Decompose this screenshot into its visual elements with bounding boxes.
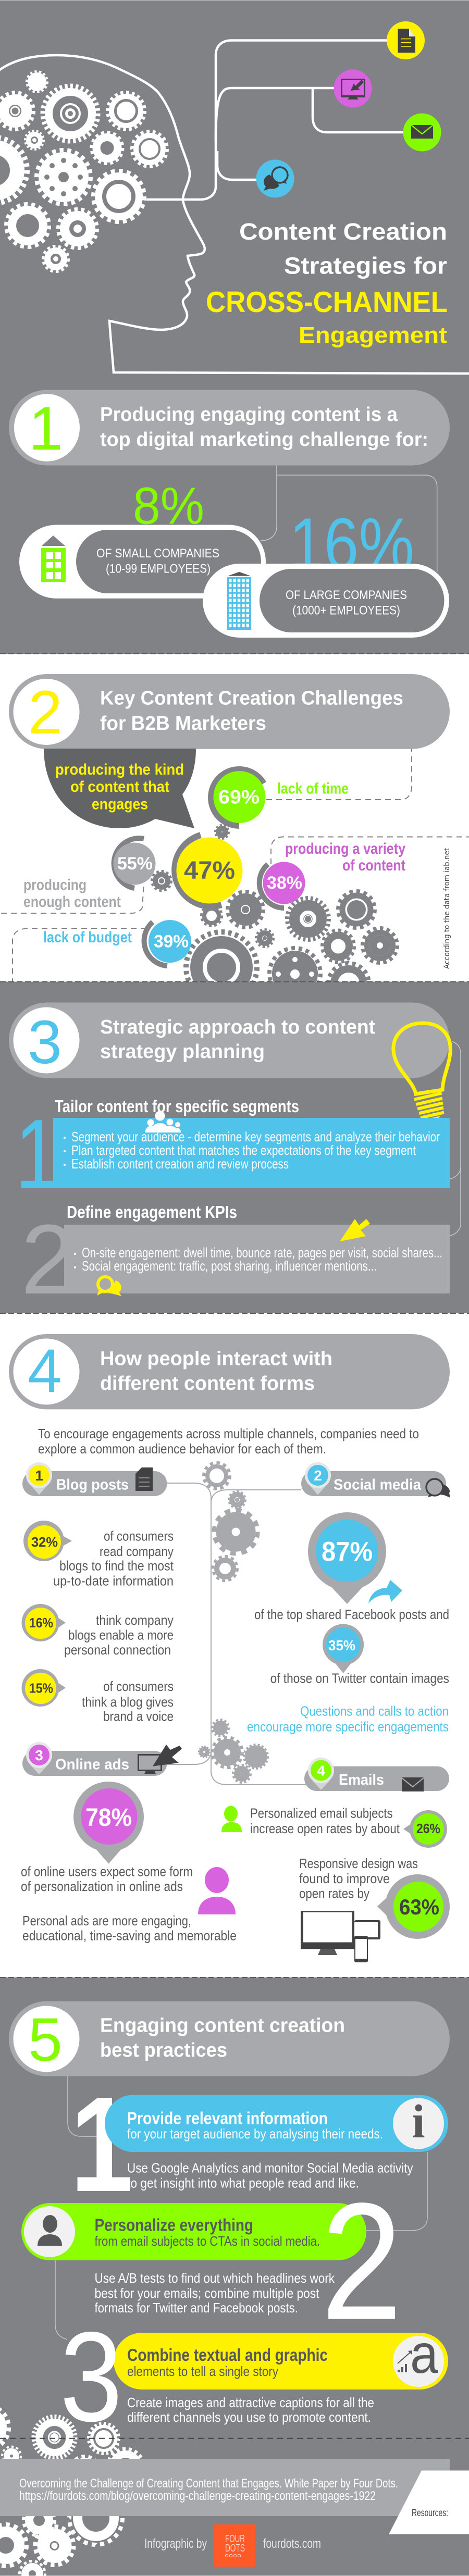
stat: 63% responsive: 63% — [399, 1895, 439, 1919]
stat: 16% large companies: OF LARGE COMPANIES — [286, 588, 407, 602]
icon: envelope — [402, 1777, 424, 1791]
channel: social media — [301, 1462, 450, 1498]
section 5 heading: Engaging content creation — [100, 2015, 345, 2037]
section 1 heading: top digital marketing challenge for: — [100, 429, 428, 451]
panel: section 5 — [0, 1977, 469, 2576]
practice 3: combine textual and graphic: elements to tell a single story — [127, 2363, 278, 2379]
section 3 heading — [9, 1002, 450, 1078]
logo: Four Dots: FOUR — [225, 2533, 245, 2545]
stat: 87% social — [254, 1512, 449, 1622]
channel: online ads — [22, 1742, 182, 1776]
channel: emails: 4 — [317, 1763, 325, 1778]
stat: 26% emails: increase open rates by about — [250, 1821, 400, 1836]
sub-block: tailor content: Tailor content for specific segments — [55, 1097, 299, 1116]
icon: audience — [145, 1111, 181, 1133]
section 5 heading: best practices — [100, 2039, 227, 2061]
section 4 heading — [9, 1334, 450, 1409]
stat: 69% lack of time: 69% — [218, 787, 260, 807]
connector lines — [261, 466, 437, 572]
stat: 78% online ads: educational, time-saving and memorable — [22, 1927, 237, 1943]
channel: social media: 2 — [314, 1467, 322, 1484]
stat: 16% large companies: (1000+ EMPLOYEES) — [292, 603, 400, 618]
dashed connectors — [266, 749, 412, 800]
gears cluster — [152, 825, 397, 1004]
stat: 47%: 47% — [184, 857, 235, 885]
stat: 38% producing a variety: producing a variety — [285, 840, 405, 857]
stat: 55% producing enough content: 55% — [117, 854, 153, 874]
stat: 32% blogs: read company — [100, 1544, 174, 1559]
stat: 8% small companies: (10-99 EMPLOYEES) — [106, 562, 211, 576]
stat: 15% blogs: of consumers — [103, 1678, 174, 1694]
logo: Four Dots — [214, 2524, 256, 2567]
section 5 heading: 5 — [28, 2006, 63, 2074]
source note: According to the data from iab.net — [443, 848, 451, 969]
icon: share arrow — [368, 1580, 402, 1603]
sub-block: tailor content: 1 — [15, 1099, 59, 1210]
icon: monitor — [334, 70, 372, 107]
stat: 15% blogs: 15% — [29, 1681, 53, 1696]
practice 3: combine textual and graphic: different channels you use to promote content. — [127, 2409, 371, 2425]
section 2 heading: for B2B Marketers — [100, 713, 266, 735]
panel: section 1 — [9, 390, 450, 638]
channel: emails — [304, 1758, 449, 1791]
speech bubble: producing content that engages: of content that — [70, 778, 169, 795]
stat: 32% blogs: of consumers — [104, 1528, 174, 1544]
sub-block: engagement KPIs — [21, 1202, 450, 1315]
section 2 heading — [9, 674, 450, 749]
speech bubble: producing content that engages: producing the kind — [55, 761, 184, 778]
sub-block: engagement KPIs: Define engagement KPIs — [67, 1202, 237, 1222]
icon: large building — [227, 572, 251, 630]
icon: light bulb — [393, 1023, 450, 1124]
icon: responsive devices — [301, 1911, 380, 1962]
stat: 32% blogs: 32% — [31, 1534, 58, 1550]
practice 2: personalize everything: formats for Twitter and Facebook posts. — [95, 2300, 298, 2316]
channel: blog posts: 1 — [35, 1467, 43, 1484]
brain gears — [0, 71, 167, 272]
stat: 16% blogs: 16% — [29, 1615, 53, 1631]
intro text — [38, 1426, 419, 1457]
icon: purple person — [198, 1867, 236, 1914]
intro text: explore a common audience behavior for each of them. — [38, 1441, 326, 1457]
stat: 16% blogs: think company — [96, 1612, 174, 1628]
practice 1: provide relevant information: 1 — [70, 2069, 133, 2220]
stat: 16% blogs — [22, 1604, 174, 1658]
icon: arrow — [340, 1219, 370, 1241]
icon: green person — [221, 1806, 242, 1832]
connector line — [450, 1041, 461, 1236]
resources band — [0, 2459, 469, 2534]
panel: section 2 — [0, 654, 469, 1004]
practice 1: provide relevant information: to get insight into what people read and like. — [127, 2175, 359, 2191]
section 4 heading: How people interact with — [100, 1348, 332, 1370]
stat: 55% producing enough content: enough content — [23, 893, 121, 911]
logo: Four Dots: DOTS — [225, 2543, 245, 2554]
practice 1: provide relevant information — [70, 2069, 448, 2220]
connector lines — [146, 41, 405, 200]
section 1 heading — [9, 390, 450, 466]
channel: online ads: Online ads — [55, 1757, 129, 1773]
stat: 78% online ads: of online users expect some form — [21, 1863, 193, 1879]
speech bubble: producing content that engages — [44, 749, 196, 828]
stat: 16% blogs: blogs enable a more — [68, 1627, 174, 1643]
stat: 32% blogs: blogs to find the most — [59, 1558, 174, 1574]
credit: infographic by — [144, 2524, 321, 2567]
icon: chat — [426, 1479, 450, 1498]
resources band: Resources: — [412, 2508, 448, 2519]
section 1 heading: 1 — [29, 394, 63, 463]
icon: analytics a: a — [410, 2323, 438, 2385]
channel: emails: Emails — [339, 1772, 384, 1788]
stat: 16% blogs: personal connection — [64, 1642, 171, 1658]
intro text: To encourage engagements across multiple channels, companies need to — [38, 1426, 419, 1441]
stat: 63% responsive: found to improve — [299, 1871, 390, 1886]
icon: mail — [403, 114, 441, 151]
icon: chat — [256, 159, 294, 198]
stat: 39% lack of budget: lack of budget — [43, 929, 132, 946]
icon: info: i — [412, 2095, 425, 2148]
title: Strategies for — [284, 253, 447, 279]
section 3 heading: strategy planning — [100, 1041, 265, 1063]
center gears — [199, 1463, 268, 1783]
title: Engagement — [299, 322, 447, 348]
practice 2: personalize everything: best for your emails; combine multiple post — [95, 2285, 319, 2301]
channel: social media: Social media — [334, 1477, 422, 1494]
panel: header hero — [0, 0, 469, 654]
stat: 78% online ads: of personalization in online ads — [21, 1878, 183, 1894]
practice 1: provide relevant information: Use Google Analytics and monitor Social Media activity — [127, 2160, 413, 2175]
stat: 26% emails: 26% — [416, 1821, 440, 1836]
practice 2: personalize everything: 2 — [321, 2168, 402, 2355]
practice 2: personalize everything: Personalize everything — [95, 2215, 253, 2235]
footer gears — [0, 2406, 143, 2576]
stat: 8% small companies: 8% — [133, 477, 204, 536]
icon: document — [387, 21, 425, 59]
stat: 8% small companies — [19, 477, 266, 599]
icon: person — [38, 2215, 62, 2246]
practice 2: personalize everything: from email subjects to CTAs in social media. — [95, 2233, 320, 2249]
stat: 8% small companies: OF SMALL COMPANIES — [96, 546, 219, 561]
icon: document — [135, 1467, 153, 1491]
title: CROSS-CHANNEL — [206, 285, 448, 319]
stat: 35% social: 35% — [328, 1637, 355, 1653]
stat: 38% producing a variety: of content — [342, 857, 405, 874]
stat: 16% large companies: 16% — [289, 503, 414, 584]
section 2 heading: 2 — [28, 678, 63, 747]
section 5 heading — [9, 2001, 450, 2076]
stat: 78% online ads: Personal ads are more engaging, — [22, 1913, 191, 1928]
panel: section 3 — [0, 981, 469, 1315]
icon: chat bubbles — [97, 1277, 121, 1296]
stat: 39% lack of budget — [43, 920, 191, 966]
stat: 87% social: 87% — [322, 1537, 373, 1567]
connector lines — [166, 1483, 307, 1785]
stat: 55% producing enough content — [23, 838, 155, 911]
stat: 15% blogs: brand a voice — [103, 1709, 174, 1724]
dashed divider — [0, 2438, 469, 2439]
stat: 26% emails: Personalized email subjects — [250, 1806, 393, 1821]
panel: section 4 — [0, 1313, 469, 1977]
section 4 heading: 4 — [28, 1337, 62, 1405]
connector lines — [55, 2076, 427, 2339]
stat: 69% lack of time — [211, 769, 349, 826]
stat: 15% blogs: think a blog gives — [82, 1694, 174, 1710]
practice 3: combine textual and graphic: Create images and attractive captions for all the — [127, 2395, 374, 2410]
stat: 16% large companies — [203, 503, 449, 638]
practice 2: personalize everything: Use A/B tests to find out which headlines work — [95, 2270, 335, 2286]
practice 3: combine textual and graphic: 3 — [60, 2305, 122, 2448]
title — [206, 218, 448, 348]
title: Content Creation — [239, 218, 447, 245]
practice 1: provide relevant information: Provide relevant information — [127, 2109, 328, 2128]
callout: questions and calls to action — [247, 1703, 449, 1734]
stat: 39% lack of budget: 39% — [154, 931, 189, 951]
head outline — [0, 55, 469, 374]
stat: 15% blogs — [22, 1669, 174, 1724]
icon: monitor with cursor — [139, 1745, 182, 1774]
stat: 35% social — [270, 1624, 449, 1686]
practice 1: provide relevant information: for your target audience by analysing their needs. — [127, 2126, 383, 2142]
sub-block: engagement KPIs: 2 — [21, 1204, 76, 1315]
callout: questions and calls to action: Questions and calls to action — [300, 1703, 449, 1719]
section 3 heading: 3 — [28, 1008, 62, 1077]
icon: small building — [41, 536, 66, 582]
channel: blog posts — [22, 1462, 167, 1496]
stat: 63% responsive — [299, 1856, 450, 1962]
stat: 63% responsive: Responsive design was — [299, 1856, 418, 1871]
credit: infographic by: Infographic by — [144, 2536, 207, 2551]
section 1 heading: Producing engaging content is a — [100, 404, 398, 426]
stat: 26% emails — [221, 1806, 447, 1848]
section 2 heading: Key Content Creation Challenges — [100, 688, 403, 710]
stat: 69% lack of time: lack of time — [277, 780, 349, 797]
section 4 heading: different content forms — [100, 1373, 315, 1395]
sub-block: tailor content — [15, 1097, 450, 1210]
sub-block: tailor content: Establish content creation and review process — [71, 1156, 289, 1172]
stat: 47% — [175, 835, 243, 906]
practice 2: personalize everything — [21, 2168, 402, 2355]
stat: 78% online ads: 78% — [85, 1804, 132, 1832]
sub-block: engagement KPIs: Social engagement: traffic, post sharing, influencer mentions... — [82, 1258, 377, 1274]
practice 3: combine textual and graphic: Combine textual and graphic — [127, 2345, 328, 2365]
stat: 38% producing a variety: 38% — [267, 873, 302, 893]
stat: 78% online ads — [21, 1782, 237, 1943]
resources band: https://fourdots.com/blog/overcoming-challenge-creating-content-engages-1922 — [19, 2489, 376, 2503]
stat: 63% responsive: open rates by — [299, 1886, 369, 1901]
credit: infographic by: fourdots.com — [263, 2536, 321, 2551]
section 3 heading: Strategic approach to content — [100, 1016, 375, 1038]
stat: 32% blogs — [23, 1521, 174, 1589]
channel: online ads: 3 — [35, 1747, 43, 1763]
speech bubble: producing content that engages: engages — [92, 796, 148, 813]
stat: 32% blogs: up-to-date information — [53, 1573, 174, 1589]
channel: blog posts: Blog posts — [56, 1477, 129, 1494]
stat: 38% producing a variety — [260, 840, 405, 908]
stat: 55% producing enough content: producing — [23, 877, 87, 894]
icon: analytics a — [398, 2323, 438, 2385]
practice 3: combine textual and graphic — [60, 2305, 448, 2448]
